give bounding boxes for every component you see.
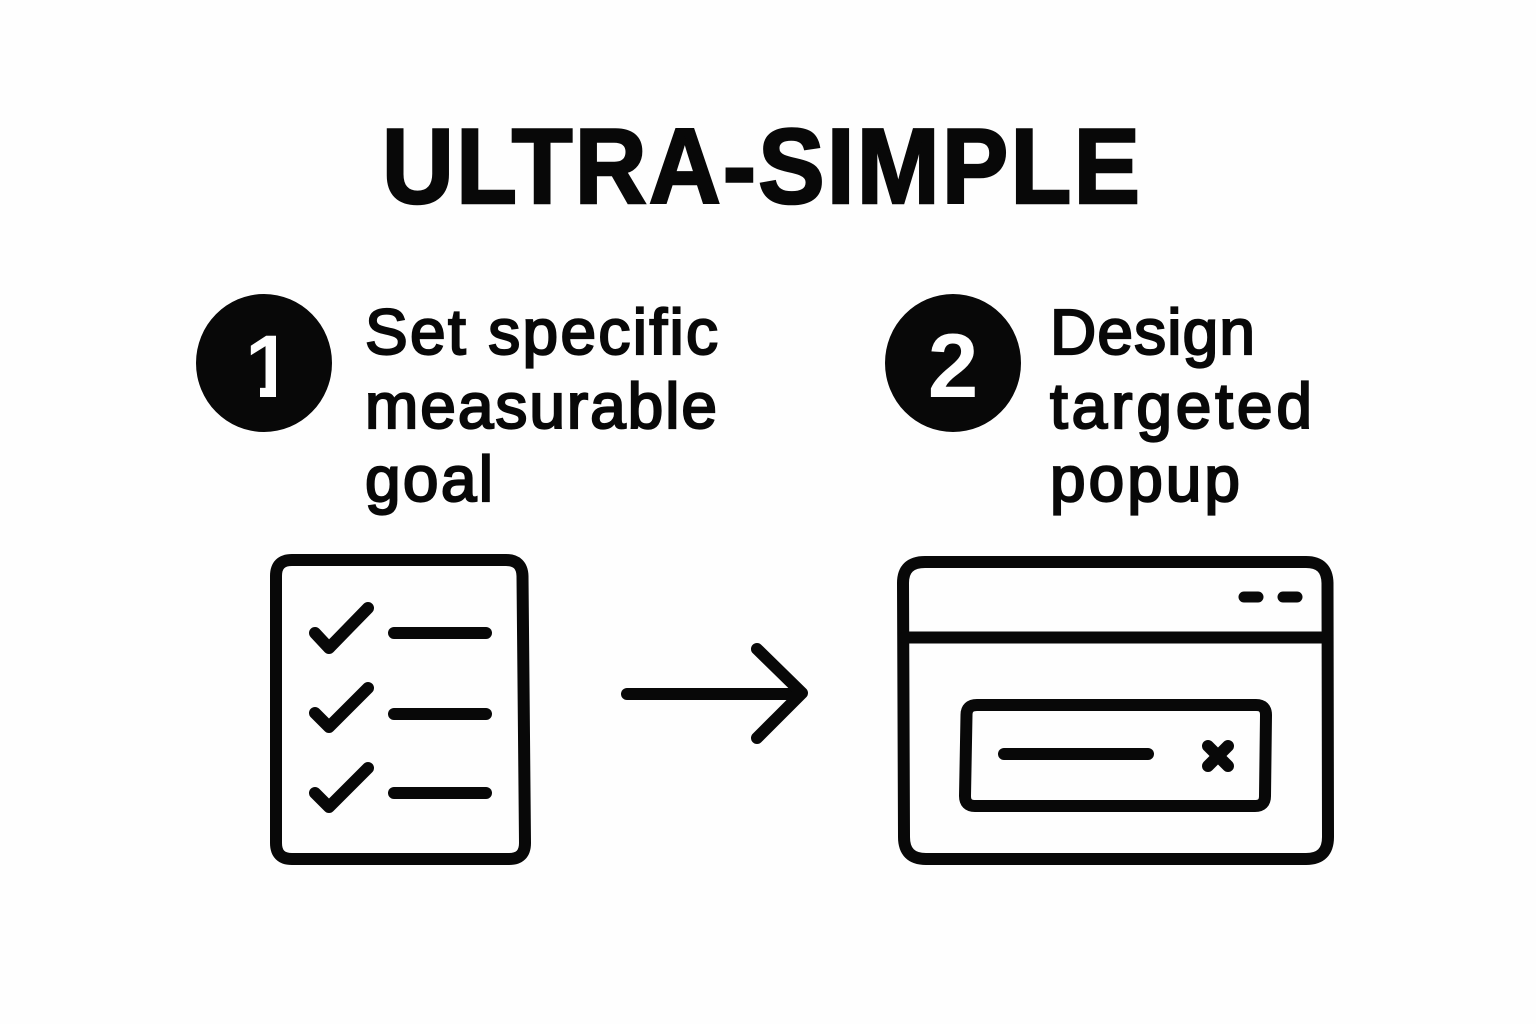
step 1 badge bbox=[196, 294, 332, 432]
step 2 text: targeted bbox=[1050, 370, 1312, 442]
step 2 text bbox=[1050, 296, 1312, 515]
step 1 text bbox=[365, 296, 718, 515]
arrow bbox=[627, 649, 802, 738]
step 2 badge bbox=[885, 294, 1021, 432]
step 2 text: Design bbox=[1050, 296, 1255, 368]
icon: checklist bbox=[276, 560, 525, 859]
step 1 text: goal bbox=[365, 443, 493, 515]
step 1 text: Set specific bbox=[365, 296, 718, 368]
popup box bbox=[965, 705, 1266, 806]
title: ULTRA-SIMPLE bbox=[382, 106, 1140, 226]
icon: browser window with popup bbox=[903, 562, 1328, 859]
step 1 badge: 1 bbox=[245, 316, 294, 416]
step 1 text: measurable bbox=[365, 370, 717, 442]
step 2 badge: 2 bbox=[928, 316, 978, 417]
step 2 text: popup bbox=[1050, 443, 1240, 515]
